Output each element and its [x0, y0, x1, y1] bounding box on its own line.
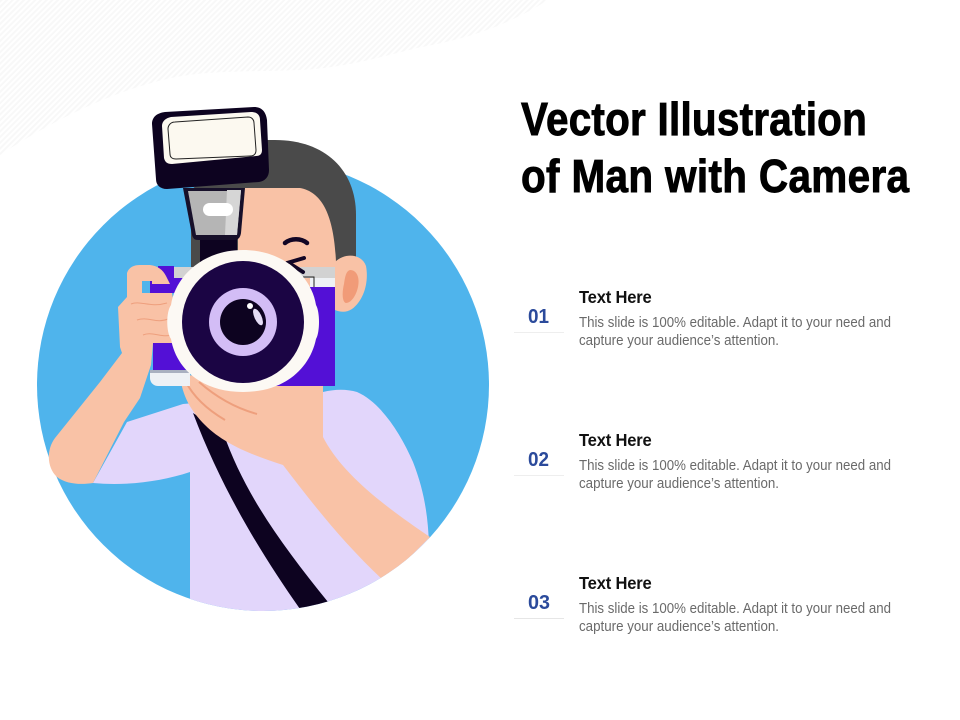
item 03: capture your audience’s attention.: [579, 619, 779, 635]
camera body: [142, 266, 335, 386]
item 02: capture your audience’s attention.: [579, 476, 779, 492]
right forearm and hand: [180, 375, 430, 582]
item 01: This slide is 100% editable. Adapt it to your need and: [579, 315, 891, 331]
item 02: [514, 429, 891, 492]
item 01: [514, 286, 891, 349]
item 01: capture your audience’s attention.: [579, 333, 779, 349]
hair: [191, 140, 356, 290]
item 01: Text Here: [579, 286, 652, 307]
illustration: man with camera: [37, 107, 489, 620]
item 01: 01: [528, 306, 549, 328]
blue circle backdrop: [37, 159, 489, 611]
flash unit: [152, 107, 269, 240]
item 03: Text Here: [579, 572, 652, 593]
lens: [167, 250, 319, 392]
item 03: 03: [528, 592, 550, 614]
item 02: Text Here: [579, 429, 652, 450]
ear: [335, 256, 367, 312]
flash stem: [200, 236, 237, 268]
left arm and hand: [49, 265, 180, 484]
item 02: 02: [528, 449, 549, 471]
item 02: This slide is 100% editable. Adapt it to your need and: [579, 458, 891, 474]
squinting eye: [287, 258, 304, 272]
face: [238, 188, 338, 300]
eyebrow: [285, 239, 307, 243]
title: [521, 95, 910, 203]
item 03: This slide is 100% editable. Adapt it to your need and: [579, 601, 891, 617]
item 03: [514, 572, 891, 635]
shirt: [93, 390, 429, 620]
hand creases: [184, 378, 257, 420]
title: of Man with Camera: [521, 152, 910, 203]
title: Vector Illustration: [521, 95, 867, 146]
camera strap: [193, 413, 328, 609]
